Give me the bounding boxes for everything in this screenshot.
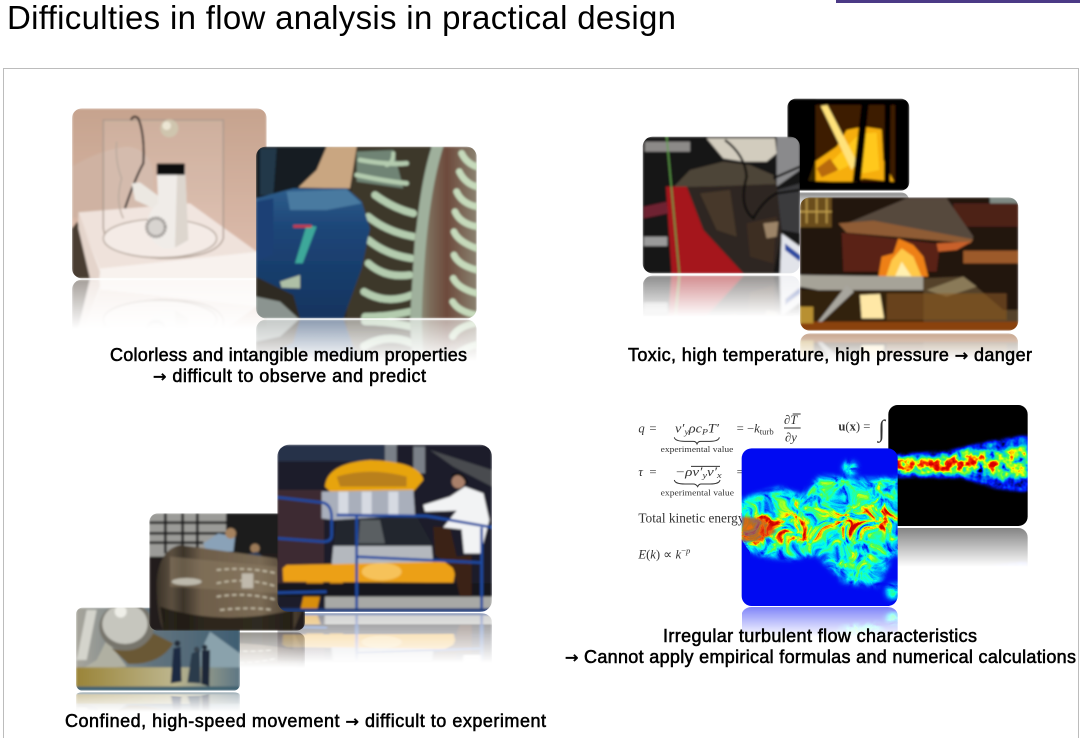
caption: Colorless and intangible medium properties [110,345,467,365]
title: Difficulties in flow analysis in practical design [7,0,676,36]
equations: y [701,470,707,480]
equations: u(x) = [838,420,870,434]
equations: E(k) ∝ k [638,547,681,561]
caption [565,626,1076,667]
photo: damaged furnace vessel [643,137,800,273]
equations: ∫ [876,417,886,444]
photo: turbulent flow colour field [742,448,901,606]
photo reflection: steel furnace [800,333,1018,358]
equations: = [737,465,744,479]
photo reflection: damaged furnace [643,276,800,314]
equations: −p [681,546,690,556]
photo reflection: turbulence [742,607,898,635]
photo reflection: fan [76,692,240,710]
photo reflection: dryer [72,280,265,325]
header accent bar [836,0,1080,3]
photo: molten metal pour [787,99,909,191]
photo: steel furnace with flames [800,197,1018,331]
equations: ∂T [784,413,798,427]
equations: y [683,426,689,436]
photo: engineers under large turbofan [76,603,240,691]
photo reflection: molten metal [798,192,909,205]
photo: hair dryer levitating ball in acrylic cylinder [72,108,267,278]
equations: ∂y [785,430,797,444]
caption: Confined, high-speed movement → difficult to experiment [65,711,546,731]
equations: = [649,421,656,435]
equations: P [701,426,709,436]
equations: experimental value [661,444,734,454]
panel: toxic, high temperature, high pressure [628,98,1032,366]
photo reflection: jet [898,528,1028,564]
caption: → Cannot apply empirical formulas and numerical calculations [565,647,1076,667]
caption: → difficult to observe and predict [153,366,426,386]
equations: = [649,465,656,479]
caption: Toxic, high temperature, high pressure → danger [628,345,1032,365]
caption [110,345,467,386]
photo reflection: turbine blades [256,320,477,358]
photo: engineers inspecting jet engine [149,513,305,631]
equations: q [638,421,645,435]
photo reflection: engine [238,632,305,666]
equations: x [716,470,722,480]
equations: experimental value [661,487,734,497]
equations: v′ [675,421,683,435]
equations [637,413,886,561]
equations: ρc [688,421,702,435]
equations: −ρv′ [675,465,698,479]
equations: turb [760,426,774,436]
equations: τ [638,465,643,479]
panel: irregular turbulent flow [566,405,1076,668]
photo: man kneeling beside turbine blades [256,147,477,318]
photo: gas turbine test rig with engineer in white coat [277,445,492,612]
equations: = −k [737,421,760,435]
photo: turbulent jet simulation on black [888,405,1028,526]
equations: v′ [707,465,717,479]
caption: Irregular turbulent flow characteristics [663,626,977,646]
photo reflection: test rig [277,613,492,660]
panel: confined, high-speed movement [65,445,546,736]
equations: T′ [708,421,719,435]
panel: colorless and intangible medium [72,108,477,491]
equations: Total kinetic energy [638,511,745,526]
